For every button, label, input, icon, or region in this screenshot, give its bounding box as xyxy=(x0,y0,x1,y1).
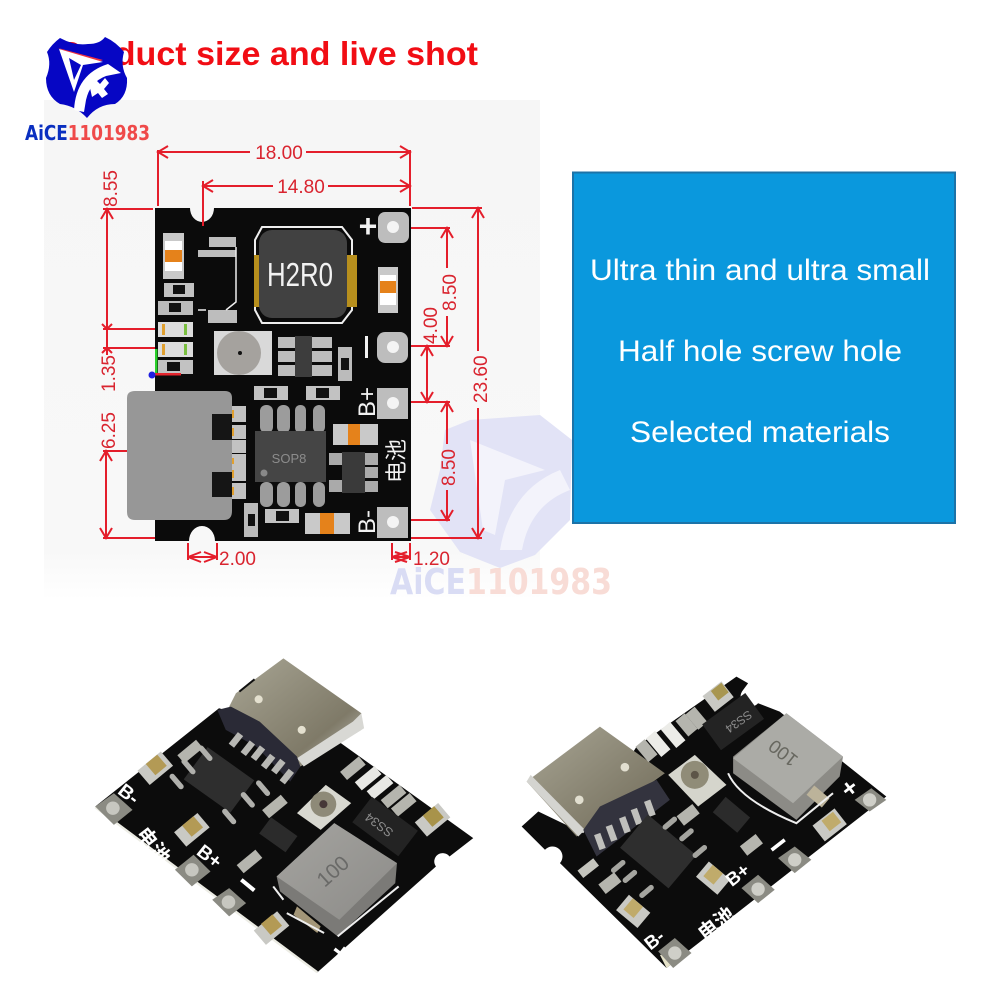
dimension labels: 23.60 xyxy=(471,355,492,403)
dimension labels: 18.00 xyxy=(255,143,303,164)
trimmer potentiometer xyxy=(214,331,272,375)
silkscreen labels: B+ xyxy=(192,840,226,873)
chip leads xyxy=(168,744,271,825)
dimension labels: 8.55 xyxy=(101,170,122,207)
USB-C shell xyxy=(217,658,364,782)
LEDs and small parts xyxy=(177,740,417,873)
dimension labels: 8.50 xyxy=(440,274,461,311)
LEDs and small parts xyxy=(578,707,763,894)
silkscreen labels: + xyxy=(323,936,357,972)
inductor 100 xyxy=(728,713,843,823)
SOP chip xyxy=(184,747,254,813)
silkscreen labels: B+ xyxy=(721,859,754,890)
chip SOP8 xyxy=(255,405,326,507)
pad labels: B+ xyxy=(354,387,381,417)
dimension labels: 4.00 xyxy=(421,307,442,344)
pad labels: B- xyxy=(354,510,381,534)
watermark: faint shield and name xyxy=(390,415,612,603)
regulator SOT chip xyxy=(278,336,332,377)
dimension labels xyxy=(99,143,492,570)
pad labels: 电池 xyxy=(384,439,409,483)
silkscreen labels xyxy=(640,773,864,954)
silkscreen labels: 电池 xyxy=(694,903,739,945)
SOT23 chip xyxy=(329,452,378,493)
resistors and capacitors xyxy=(158,233,398,537)
SS34 diode xyxy=(352,797,418,856)
dimension labels: 14.80 xyxy=(277,177,325,198)
dimension lines xyxy=(100,146,484,562)
solder pads xyxy=(658,788,886,968)
pad labels: + xyxy=(359,208,377,244)
origin axis marker xyxy=(148,349,181,378)
terminal pads xyxy=(377,212,409,538)
solder pads xyxy=(95,793,246,916)
panel: features xyxy=(573,172,955,523)
contact pads row xyxy=(229,732,294,784)
chip leads xyxy=(610,816,708,899)
board drawing: top view PCB xyxy=(127,208,411,541)
logo: brand shield xyxy=(25,37,150,145)
photo: module left, inductor facing viewer xyxy=(95,658,473,972)
dimension labels: 6.25 xyxy=(99,412,120,449)
chip SOP8: SOP8 xyxy=(272,451,306,466)
inductor 100: 100 xyxy=(312,852,354,892)
photo: module right, USB facing viewer xyxy=(522,677,886,968)
inductor H2R0: H2R0 xyxy=(267,256,333,293)
dimension labels: 8.50 xyxy=(439,449,460,486)
silkscreen labels xyxy=(113,780,357,972)
SOT chip xyxy=(259,817,297,852)
dimension labels: 1.35 xyxy=(99,355,120,392)
capacitors xyxy=(616,681,847,928)
inductor 100 xyxy=(273,823,399,936)
SOT chip xyxy=(713,797,750,833)
SOP chip xyxy=(620,815,696,888)
feature 3: Selected materials xyxy=(630,416,890,449)
SS34 diode: SS34 xyxy=(722,707,755,736)
panel: drawing background xyxy=(44,100,540,600)
trimmer xyxy=(668,755,726,807)
silkscreen labels: 电池 xyxy=(131,823,175,869)
SS34 diode xyxy=(702,693,764,750)
trimmer xyxy=(297,785,351,830)
feature 2: Half hole screw hole xyxy=(618,335,902,368)
watermark text: AiCE1101983 xyxy=(390,562,612,603)
silkscreen labels: B- xyxy=(640,925,668,954)
title: Product size and live shot xyxy=(58,35,478,72)
dimension labels: 1.20 xyxy=(413,549,450,570)
USB-C shell xyxy=(527,727,670,856)
inductor 100: 100 xyxy=(764,736,802,771)
pad labels xyxy=(354,208,409,534)
SS34 diode: SS34 xyxy=(362,810,396,840)
silkscreen labels: B- xyxy=(113,780,143,809)
feature 1: Ultra thin and ultra small xyxy=(590,254,930,287)
USB-C connector xyxy=(127,391,246,520)
silkscreen labels: + xyxy=(835,773,864,804)
dimension labels: 2.00 xyxy=(219,549,256,570)
inductor H2R0 xyxy=(254,227,357,323)
logo wordmark: AiCE1101983 xyxy=(25,121,150,145)
capacitors xyxy=(137,751,450,945)
